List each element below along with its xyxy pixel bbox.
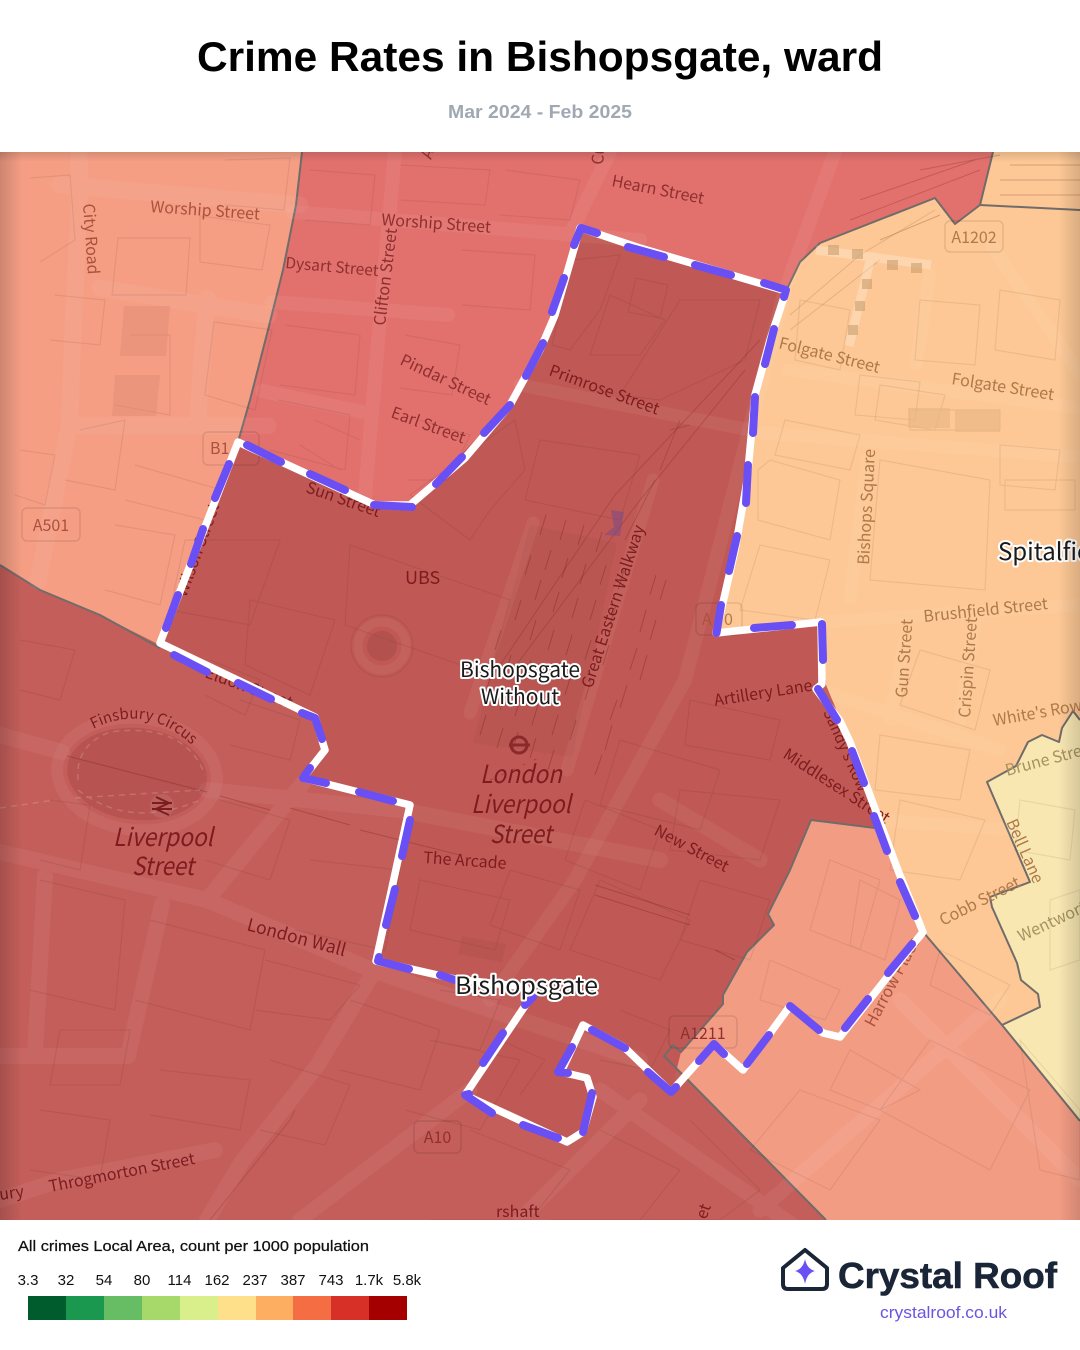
pedestrian bridge shaded blocks — [828, 245, 922, 335]
street labels: Cobb Street — [934, 869, 1024, 930]
road badge: A501 — [22, 508, 80, 541]
street labels: Harrow Place — [857, 931, 925, 1030]
legend value labels: 237 — [242, 1272, 268, 1289]
map zone: dark red base — [0, 436, 872, 1220]
place label: Bishopsgate Without: Without — [481, 681, 559, 711]
legend value labels: 3.3 — [18, 1272, 38, 1289]
map — [0, 152, 1080, 1220]
place label: Liverpool Street west: Liverpool — [113, 818, 216, 854]
street labels: Primrose Street — [546, 357, 663, 419]
map zone: yellow south east — [987, 711, 1080, 1121]
pedestrian bridge stripes — [816, 250, 931, 346]
icon: house with star — [783, 1250, 827, 1289]
street labels: Bell Lane — [1001, 814, 1051, 887]
street labels: Earl Street — [388, 399, 469, 448]
map zone: salmon west — [0, 152, 302, 645]
street labels: Pindar Street — [397, 347, 496, 410]
road badge: A10 south: A10 — [424, 1124, 451, 1148]
title: Crime Rates in Bishopsgate, ward — [197, 33, 883, 80]
road badge: B134 — [203, 432, 259, 465]
ward boundary dashed line — [160, 228, 923, 1142]
street labels: Sun Street — [303, 474, 384, 522]
road badge: A10 north: 0 — [724, 606, 733, 630]
street labels: Artillery Lane — [712, 672, 814, 711]
street labels: Dysart Street — [285, 251, 380, 281]
wordmark: Crystal Roof — [838, 1255, 1058, 1296]
street labels: Al — [413, 140, 441, 162]
road badge: A10 north: A — [702, 606, 712, 630]
place label: London Liverpool Street — [473, 763, 574, 844]
place label: Liverpool Street west: Street — [132, 847, 197, 883]
street labels: Great Eastern Walkway — [574, 521, 649, 691]
map zone: peach east — [721, 152, 1080, 1024]
street labels: Folgate Street — [777, 330, 883, 378]
street labels: et — [688, 1200, 716, 1222]
place label: London Liverpool Street: London — [480, 755, 564, 791]
market block shading — [908, 408, 1000, 432]
street labels: Clifton Street — [366, 226, 402, 327]
legend value labels: 5.8k — [393, 1272, 422, 1289]
place label: Bishopsgate Without — [460, 658, 582, 706]
legend value labels: 162 — [204, 1272, 230, 1289]
rail icon — [150, 794, 174, 818]
road badge: A1211 — [669, 1016, 737, 1048]
road badge: A10 north — [696, 603, 742, 635]
road badge: A1211: A1211 — [680, 1020, 726, 1044]
street labels: Gun Street — [888, 618, 917, 698]
street labels: Throgmorton Street — [46, 1145, 197, 1197]
legend value labels: 743 — [318, 1272, 344, 1289]
legend — [18, 1238, 422, 1320]
street labels: The Arcade — [423, 844, 508, 874]
legend title: All crimes Local Area, count per 1000 population — [18, 1238, 369, 1255]
street labels: UBS — [405, 564, 440, 590]
street labels: Worship Street — [381, 206, 492, 238]
roads — [53, 205, 748, 1007]
street labels: rshaft — [496, 1198, 540, 1222]
ward interior shade — [666, 680, 829, 1068]
Finsbury Circus garden — [68, 728, 206, 820]
street labels: Crispin Street — [951, 616, 982, 718]
road badge: A501: A501 — [33, 512, 69, 536]
road badge: A10 south — [414, 1121, 461, 1153]
logo: Crystal Roof — [781, 1248, 1058, 1322]
street labels: Finsbury Circus — [90, 708, 196, 744]
map edge shading — [0, 152, 1080, 1220]
place label: Liverpool Street west — [115, 826, 216, 876]
street labels: Sandy's Row — [818, 705, 874, 795]
street labels: Brushfield Street — [922, 590, 1049, 627]
map zone: salmon south east — [664, 820, 1080, 1220]
railway and track lines — [67, 155, 1080, 1220]
place label: Bishopsgate Without: Bishopsgate — [460, 654, 580, 684]
road badge: B134: B1 — [210, 435, 229, 459]
subtitle: date range: Mar 2024 - Feb 2025 — [448, 102, 632, 122]
street labels: City Road — [78, 203, 107, 275]
place label: Bishopsgate: Bishopsgate — [455, 966, 598, 1001]
legend value labels: 387 — [280, 1272, 306, 1289]
legend value labels — [18, 1272, 422, 1289]
street labels: Bishops Square — [850, 448, 880, 565]
legend colour scale — [28, 1296, 407, 1320]
street labels: Folgate Street — [950, 365, 1056, 405]
road badge: A1202: A1202 — [951, 224, 997, 248]
Finsbury garden paths — [0, 730, 205, 813]
street labels: Cu — [584, 144, 610, 165]
street labels: New Street — [651, 817, 734, 877]
street labels: London Wall — [244, 912, 349, 962]
tube roundel icon — [509, 737, 530, 753]
legend value labels: 114 — [168, 1272, 191, 1289]
street labels: Wilson Street — [168, 499, 224, 600]
street labels: Middlesex Street — [779, 741, 896, 828]
road badge: A1202 — [945, 221, 1003, 252]
legend value labels: 80 — [134, 1272, 150, 1289]
street labels: Worship Street — [150, 193, 261, 225]
zone boundaries — [0, 152, 1080, 1220]
place label: London Liverpool Street: Liverpool — [471, 785, 574, 821]
street labels: Hearn Street — [610, 167, 706, 209]
legend value labels: 1.7k — [355, 1272, 384, 1289]
map zone: medium red north — [238, 152, 993, 505]
legend value labels: 54 — [96, 1272, 112, 1289]
place label: London Liverpool Street: Street — [490, 815, 555, 851]
building outlines — [15, 158, 1080, 1220]
website url: crystalroof.co.uk — [880, 1304, 1008, 1322]
station concourse shade — [473, 525, 617, 757]
legend value labels: 32 — [58, 1272, 74, 1289]
street labels: Eldon Street — [202, 659, 297, 713]
purple structure icon — [604, 510, 624, 536]
